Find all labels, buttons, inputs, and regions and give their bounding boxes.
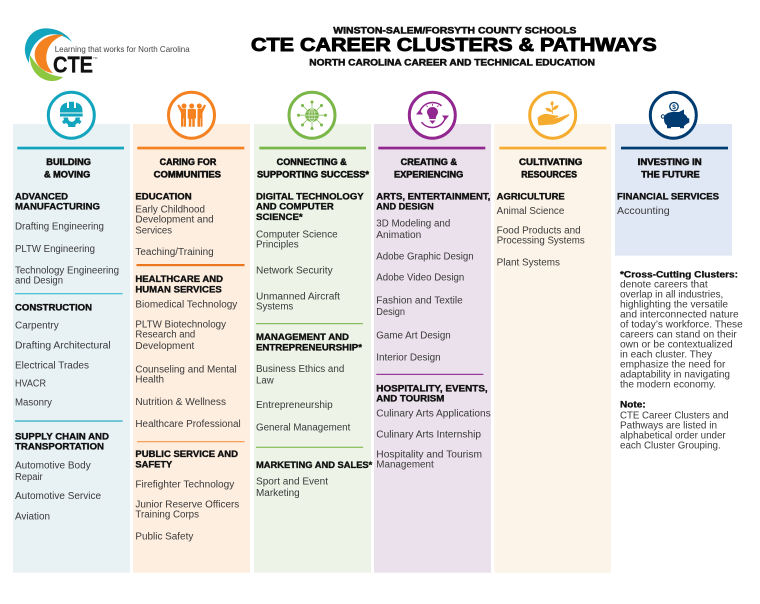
cluster: Public Service and Safety: PUBLIC SERVICE AND (135, 449, 238, 459)
cluster: Agriculture: Food Products and (497, 226, 581, 237)
cluster: Public Service and Safety: Public Safety (135, 531, 193, 542)
cluster: Healthcare and Human Services: Development (135, 341, 195, 352)
cluster: Education: Teaching/Training (135, 247, 214, 258)
cluster: Healthcare and Human Services: Biomedical Technology (135, 299, 237, 310)
cluster: Marketing and Sales (256, 460, 373, 499)
heading: Building & Moving (44, 157, 91, 179)
cluster: Management and Entrepreneurship: Law (256, 375, 275, 386)
cluster: Public Service and Safety: SAFETY (135, 459, 172, 469)
cluster: Healthcare and Human Services: Healthcare Professional (135, 419, 241, 430)
text block: Cross-Cutting Clusters explanation (620, 270, 743, 390)
cluster: Digital Technology and Computer Science: Systems (256, 302, 293, 313)
cluster: Arts, Entertainment, and Design: Animation (376, 230, 421, 241)
cluster: Construction: Electrical Trades (15, 361, 89, 372)
cluster: Supply Chain and Transportation: Automotive Body (15, 461, 91, 472)
text block: Cross-Cutting Clusters explanation: emphasize the need for (620, 360, 726, 371)
cluster: Public Service and Safety: Junior Reserve Officers (135, 499, 239, 510)
icon: piggy bank with coin (650, 92, 696, 138)
panel: Caring for Communities (133, 92, 250, 573)
panel: Building & Moving (13, 92, 130, 573)
cluster: Arts, Entertainment, and Design: Design (376, 307, 405, 318)
cluster: Public Service and Safety: Training Corps (135, 509, 199, 520)
cluster: Supply Chain and Transportation (15, 431, 109, 522)
text block: Note: CTE Career Clusters and (620, 410, 729, 421)
cluster: Advanced Manufacturing: ADVANCED (15, 192, 68, 202)
cluster: Marketing and Sales: Marketing (256, 488, 300, 499)
cluster: Marketing and Sales: Sport and Event (256, 477, 328, 488)
cluster: Agriculture: Animal Science (497, 206, 565, 217)
cluster: Advanced Manufacturing: and Design (15, 276, 63, 287)
cluster: Supply Chain and Transportation: Repair (15, 472, 43, 483)
heading: Cultivating Resources (519, 157, 582, 179)
cluster: Construction: CONSTRUCTION (15, 303, 92, 313)
logo: CTE: CTE (53, 52, 93, 78)
icon: helmet and gear (48, 92, 94, 138)
heading: Creating & Experiencing: EXPERIENCING (394, 169, 463, 179)
panel: Creating & Experiencing (374, 92, 491, 573)
cluster: Construction: Drafting Architectural (15, 340, 111, 351)
cluster: Advanced Manufacturing: Drafting Engineering (15, 222, 104, 232)
cluster: Hospitality, Events, and Tourism: Hospitality and Tourism (376, 450, 482, 461)
heading: Connecting & Supporting Success: CONNECTING & (277, 157, 347, 167)
cluster: Digital Technology and Computer Science: Principles (256, 240, 299, 251)
heading: Creating & Experiencing: CREATING & (401, 157, 458, 167)
cluster: Arts, Entertainment, and Design: Fashion and Textile (376, 296, 463, 307)
cluster: Arts, Entertainment, and Design: Interior Design (376, 353, 441, 364)
panel: Connecting & Supporting Success (254, 92, 373, 573)
cluster: Construction: Masonry (15, 398, 52, 409)
cluster: Education: EDUCATION (135, 192, 192, 202)
heading: Connecting & Supporting Success: SUPPORTING SUCCESS* (257, 169, 370, 179)
cluster: Advanced Manufacturing: Technology Engineering (15, 266, 119, 277)
text block: Note: Note: (620, 400, 646, 411)
cluster: Education: Early Childhood (135, 204, 205, 215)
cluster: Agriculture: Processing Systems (497, 236, 585, 247)
icon: light bulb with cycle arrows (409, 92, 455, 138)
cluster: Management and Entrepreneurship (256, 332, 362, 434)
cluster: Advanced Manufacturing: PLTW Engineering (15, 244, 95, 255)
cluster: Digital Technology and Computer Science: Computer Science (256, 230, 338, 241)
cluster: Healthcare and Human Services: Nutrition & Wellness (135, 397, 226, 408)
heading: Creating & Experiencing (394, 157, 463, 179)
title block: WINSTON-SALEM/FORSYTH COUNTY SCHOOLS (333, 25, 576, 35)
cluster: Digital Technology and Computer Science (256, 191, 364, 313)
cluster: Advanced Manufacturing: MANUFACTURING (15, 202, 100, 212)
logo: CTE: Learning that works for North Carolina (55, 44, 190, 54)
text block: Note: Pathways are listed in (620, 420, 717, 431)
text block: Cross-Cutting Clusters explanation: *Cross-Cutting Clusters: (620, 270, 738, 281)
text block: Cross-Cutting Clusters explanation: of today’s workforce. These (620, 320, 743, 331)
cluster: Arts, Entertainment, and Design: Game Art Design (376, 331, 451, 342)
cluster: Public Service and Safety (135, 449, 239, 542)
panel: Cultivating Resources (494, 92, 611, 573)
logo: CTE: TM (93, 56, 98, 60)
cluster: Arts, Entertainment, and Design (376, 191, 490, 364)
title block: NORTH CAROLINA CAREER AND TECHNICAL EDUCATION (309, 58, 595, 68)
cluster: Healthcare and Human Services (135, 274, 241, 430)
heading: Investing in the Future: THE FUTURE (641, 169, 700, 179)
heading: Cultivating Resources: RESOURCES (521, 169, 577, 179)
cluster: Agriculture (497, 191, 585, 268)
text block: Note: each Cluster Grouping. (620, 440, 721, 451)
cluster: Digital Technology and Computer Science: Unmanned Aircraft (256, 292, 340, 303)
cluster: Agriculture: AGRICULTURE (497, 191, 565, 201)
cluster: Healthcare and Human Services: Health (135, 374, 164, 385)
text block: Note (620, 400, 729, 451)
cluster: Arts, Entertainment, and Design: Adobe Graphic Design (376, 251, 474, 262)
text block: Note: alphabetical order under (620, 430, 726, 441)
cluster: Healthcare and Human Services: PLTW Biotechnology (135, 320, 226, 331)
text block: Cross-Cutting Clusters explanation: denote careers that (620, 280, 708, 291)
heading: Caring for Communities: CARING FOR (160, 157, 217, 167)
cluster: Hospitality, Events, and Tourism: Management (376, 460, 434, 471)
cluster: Healthcare and Human Services: Counseling and Mental (135, 364, 237, 375)
cluster: Financial Services: Accounting (617, 206, 670, 217)
text block: Cross-Cutting Clusters explanation: adaptability in navigating (620, 370, 730, 381)
cluster: Marketing and Sales: MARKETING AND SALES* (256, 460, 373, 470)
cluster: Healthcare and Human Services: HEALTHCARE AND (135, 274, 223, 284)
cluster: Management and Entrepreneurship: ENTREPRENEURSHIP* (256, 342, 362, 352)
text block: Cross-Cutting Clusters explanation: the modern economy. (620, 379, 716, 390)
cluster: Management and Entrepreneurship: Business Ethics and (256, 364, 344, 375)
text block: Cross-Cutting Clusters explanation: overlap in all industries, (620, 290, 723, 301)
heading: Connecting & Supporting Success (257, 157, 370, 179)
cluster: Education (135, 192, 214, 258)
cluster: Education: Services (135, 226, 172, 237)
cluster: Agriculture: Plant Systems (497, 257, 560, 268)
cluster: Construction (15, 303, 111, 409)
text block: Cross-Cutting Clusters explanation: careers can stand on their (620, 330, 737, 341)
cluster: Healthcare and Human Services: Research and (135, 330, 195, 341)
cluster: Education: Development and (135, 214, 214, 225)
cluster: Arts, Entertainment, and Design: Adobe Video Design (376, 273, 464, 284)
text block: Cross-Cutting Clusters explanation: in each cluster. They (620, 350, 712, 361)
cluster: Supply Chain and Transportation: TRANSPORTATION (15, 442, 104, 452)
heading: Investing in the Future: INVESTING IN (638, 157, 702, 167)
cluster: Management and Entrepreneurship: Entrepreneurship (256, 400, 333, 411)
cluster: Advanced Manufacturing (15, 192, 119, 287)
icon: globe network (289, 92, 335, 138)
cluster: Financial Services (617, 191, 719, 217)
cluster: Supply Chain and Transportation: SUPPLY CHAIN AND (15, 431, 109, 441)
cluster: Digital Technology and Computer Science: AND COMPUTER (256, 202, 334, 212)
cluster: Construction: Carpentry (15, 321, 59, 332)
heading: Building & Moving: BUILDING (46, 157, 91, 167)
logo: CTE (25, 28, 190, 81)
text block: Cross-Cutting Clusters explanation: and interconnected nature (620, 310, 739, 321)
heading: Investing in the Future (638, 157, 702, 179)
cluster: Supply Chain and Transportation: Automotive Service (15, 491, 102, 502)
cluster: Hospitality, Events, and Tourism: AND TOURISM (376, 394, 445, 404)
heading: Cultivating Resources: CULTIVATING (519, 157, 582, 167)
cluster: Supply Chain and Transportation: Aviation (15, 511, 50, 522)
icon: piggy bank with coin: $ (672, 104, 676, 111)
cluster: Hospitality, Events, and Tourism: Culinary Arts Applications (376, 408, 491, 419)
cluster: Hospitality, Events, and Tourism (376, 383, 491, 471)
icon: hand holding sprout (530, 92, 576, 138)
cluster: Arts, Entertainment, and Design: 3D Modeling and (376, 219, 450, 230)
cluster: Construction: HVACR (15, 379, 46, 390)
cluster: Digital Technology and Computer Science: Network Security (256, 266, 333, 277)
cluster: Arts, Entertainment, and Design: ARTS, ENTERTAINMENT, (376, 191, 490, 201)
heading: Caring for Communities: COMMUNITIES (154, 169, 221, 179)
cluster: Digital Technology and Computer Science: SCIENCE* (256, 212, 303, 222)
cluster: Arts, Entertainment, and Design: AND DESIGN (376, 202, 434, 212)
title block (251, 25, 657, 68)
cluster: Hospitality, Events, and Tourism: HOSPITALITY, EVENTS, (376, 383, 488, 393)
title block: CTE CAREER CLUSTERS & PATHWAYS (251, 34, 657, 55)
cluster: Financial Services: FINANCIAL SERVICES (617, 191, 719, 201)
cluster: Management and Entrepreneurship: MANAGEMENT AND (256, 332, 349, 342)
text block: Cross-Cutting Clusters explanation: highlighting the versatile (620, 300, 729, 311)
cluster: Public Service and Safety: Firefighter Technology (135, 479, 234, 490)
cluster: Healthcare and Human Services: HUMAN SERVICES (135, 284, 222, 294)
heading: Caring for Communities (154, 157, 221, 179)
cluster: Hospitality, Events, and Tourism: Culinary Arts Internship (376, 430, 482, 441)
cluster: Management and Entrepreneurship: General Management (256, 423, 351, 434)
cluster: Digital Technology and Computer Science: DIGITAL TECHNOLOGY (256, 191, 364, 201)
heading: Building & Moving: & MOVING (44, 169, 90, 179)
text block: Cross-Cutting Clusters explanation: own or be contextualized (620, 340, 733, 351)
icon: group of people (168, 92, 214, 138)
panel: Investing in the Future (615, 92, 732, 256)
